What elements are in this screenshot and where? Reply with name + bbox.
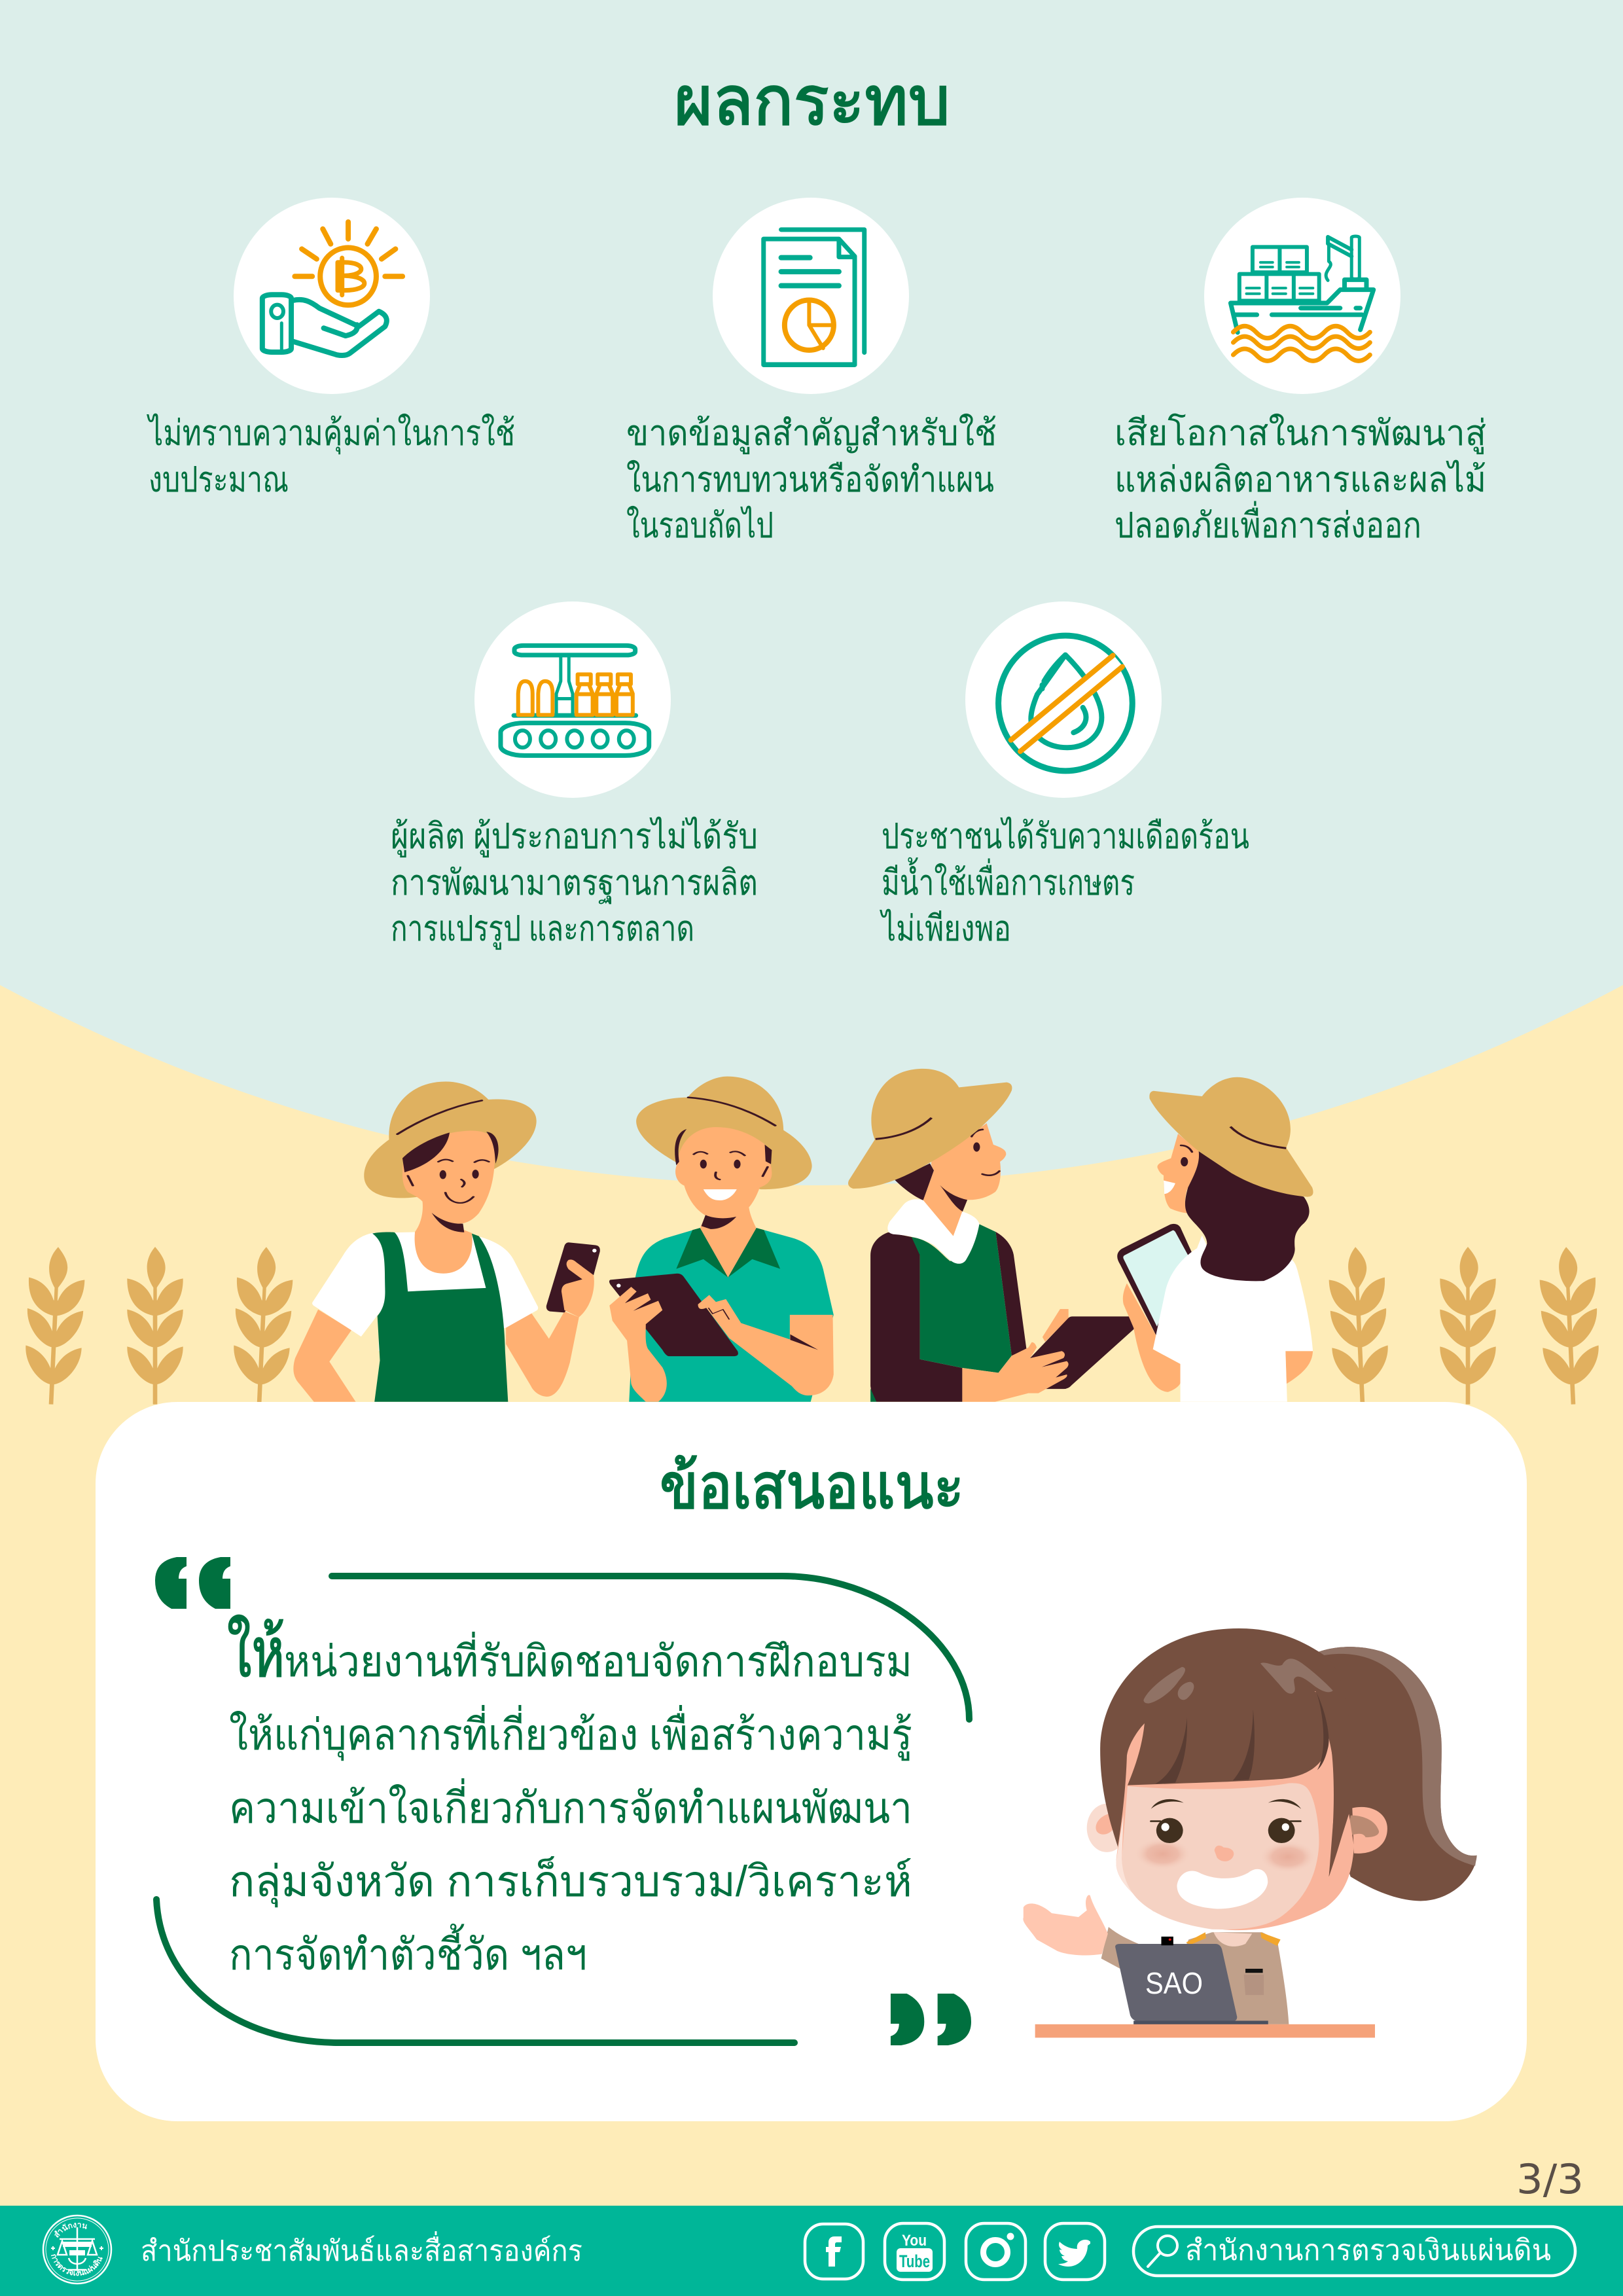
icon: youtube [885, 2223, 944, 2280]
text: impact 3: เสียโอกาสในการพัฒนาสู่ [1115, 413, 1486, 454]
text: impact 1: ไม่ทราบความคุ้มค่าในการใช้ [147, 413, 515, 455]
text: laptop label: SAO [1145, 1966, 1203, 2000]
text: recommendation body: ให้แก่บุคลากรที่เกี่ยวข้อง เพื่อสร้างความรู้ [229, 1705, 912, 1761]
icon: emblem of the audit office: การตรวจเงินแผ่นดิน [51, 2254, 103, 2276]
icon: youtube: You [902, 2232, 927, 2250]
icon: twitter [1045, 2223, 1105, 2280]
icon: youtube: Tube [899, 2251, 930, 2271]
text: impact 4: การพัฒนามาตรฐานการผลิต [391, 863, 758, 904]
text: impact 3: ปลอดภัยเพื่อการส่งออก [1115, 501, 1421, 545]
icon: facebook [805, 2224, 863, 2279]
text: department name: สำนักประชาสัมพันธ์และสื่อสารองค์กร [141, 2231, 582, 2267]
text: impact 1: งบประมาณ [149, 460, 289, 499]
illustration: farmer in dark shirt with tablet [848, 1069, 1143, 1402]
icon: emblem of the audit office: สำนักงาน [54, 2223, 87, 2238]
icon: opening quote [155, 1557, 230, 1609]
text: impact 4: ผู้ผลิต ผู้ประกอบการไม่ได้รับ [391, 816, 758, 857]
panel: impact 1 budget value [147, 198, 515, 499]
icon: crossed water drop [965, 601, 1162, 798]
text: impact 4 [391, 816, 758, 950]
text: impact 2 [626, 413, 997, 545]
text: impact 4: การแปรรูป และการตลาด [391, 909, 694, 950]
text: search term: สำนักงานการตรวจเงินแผ่นดิน [1185, 2234, 1551, 2267]
panel: impact 5 water shortage [880, 601, 1249, 948]
panel: impact 3 export opportunity [1115, 198, 1486, 545]
panel: recommendation card [96, 1402, 1527, 2121]
text: impact 5: มีน้ำใช้เพื่อการเกษตร [882, 857, 1135, 903]
text: impact 2: ในการทบทวนหรือจัดทำแผน [626, 459, 994, 499]
icon: cargo ship on waves [1204, 198, 1400, 394]
icon: bottling conveyor [474, 601, 671, 798]
frame line top right [332, 1576, 969, 1719]
text: impact 2: ในรอบถัดไป [626, 505, 774, 545]
panel: impact 4 producers [391, 601, 758, 950]
text: recommendation body: กลุ่มจังหวัด การเก็บรวบรวม/วิเคราะห์ [229, 1856, 912, 1908]
page number: 3/3 [1516, 2155, 1584, 2203]
heading: impacts: ผลกระทบ [674, 63, 950, 139]
text: impact 5: ไม่เพียงพอ [880, 908, 1011, 948]
icon: document with pie chart [713, 198, 909, 394]
search pill [1133, 2227, 1575, 2276]
text: impact 2: ขาดข้อมูลสำคัญสำหรับใช้ [626, 413, 997, 454]
illustration: farmer with tablet in teal shirt [609, 1077, 834, 1402]
text: recommendation body [227, 1615, 912, 1979]
frame line bottom left [156, 1899, 794, 2043]
icon: instagram [966, 2223, 1026, 2280]
heading: recommendation: ข้อเสนอแนะ [660, 1452, 964, 1522]
text: impact 5: ประชาชนได้รับความเดือดร้อน [882, 816, 1249, 856]
illustration: officer girl with SAO laptop [1023, 1628, 1477, 2037]
text: impact 5 [880, 816, 1249, 948]
text: recommendation body: การจัดทำตัวชี้วัด ฯลฯ [229, 1924, 587, 1979]
icon: magnifier [1148, 2236, 1177, 2267]
text: impact 1 [147, 413, 515, 499]
icon: hand holding baht coin [234, 198, 430, 394]
icon: emblem of the audit office [42, 2215, 113, 2284]
background: pale sky panel with curved bottom [0, 0, 1623, 1185]
icon: wheat stalks right [1327, 1246, 1601, 1406]
text: impact 3: แหล่งผลิตอาหารและผลไม้ [1115, 459, 1486, 499]
illustration: farmer with phone [293, 1081, 600, 1402]
illustration: farmer seen from behind with tablet [1117, 1077, 1313, 1402]
icon: closing quote [891, 1994, 971, 2045]
text: impact 3 [1115, 413, 1486, 545]
icon: wheat stalks left [23, 1246, 294, 1406]
text: recommendation body: ให้ [227, 1615, 285, 1691]
text: recommendation body: ความเข้าใจเกี่ยวกับการจัดทำแผนพัฒนา [229, 1778, 912, 1832]
panel: impact 2 missing data [626, 198, 997, 545]
footer bar [0, 2206, 1623, 2296]
text: recommendation body: หน่วยงานที่รับผิดชอบจัดการฝึกอบรม [284, 1632, 912, 1685]
